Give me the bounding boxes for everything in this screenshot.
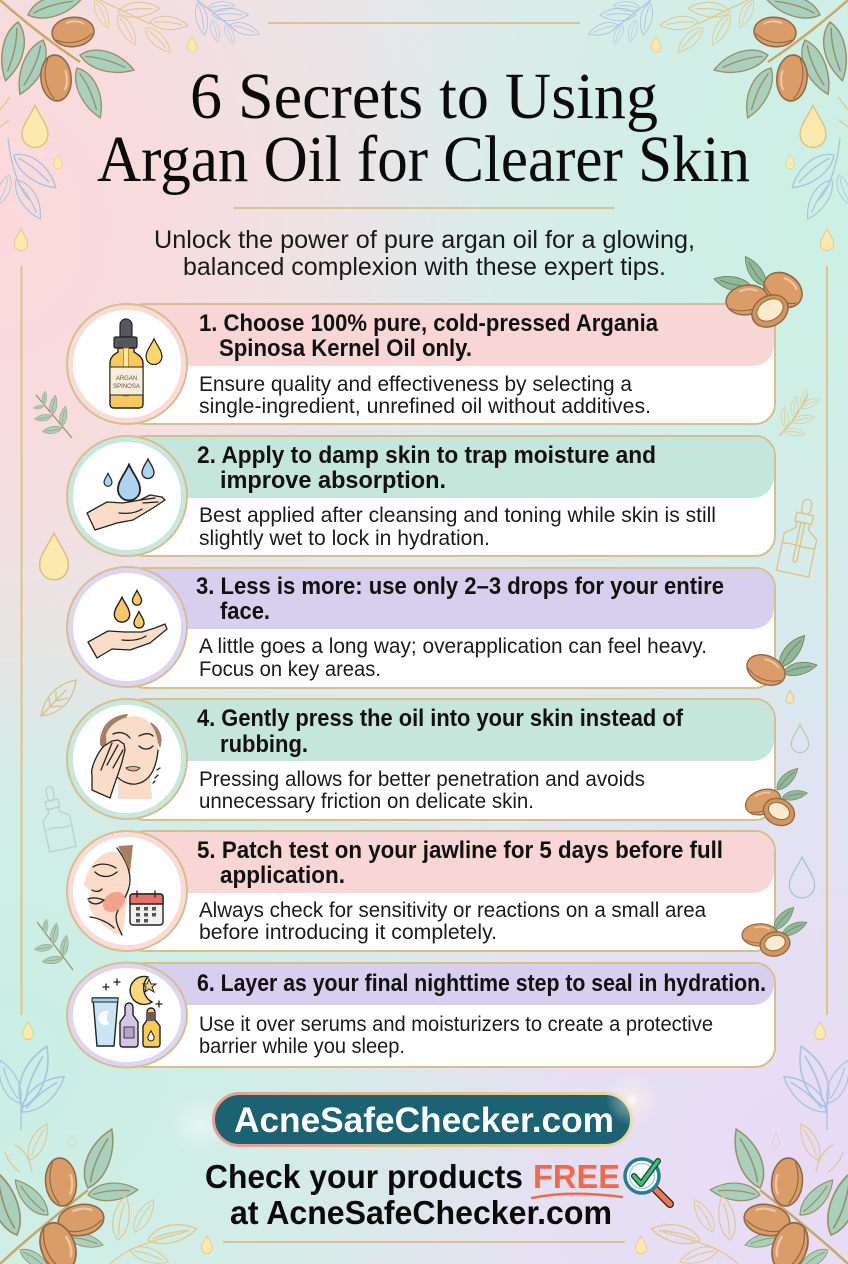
step 1 body: single-ingredient, unrefined oil without additives. <box>199 395 651 418</box>
step 5 heading <box>197 837 723 889</box>
card 6 <box>67 962 775 1068</box>
step 4 heading <box>197 705 684 758</box>
soft glow left of pill <box>168 1093 232 1157</box>
step 6 body: Use it over serums and moisturizers to create a protective <box>199 1013 713 1036</box>
step 6 body: barrier while you sleep. <box>199 1035 405 1058</box>
decoration: bottom-right branch <box>635 1022 848 1264</box>
cluster near card 5 <box>742 904 809 959</box>
call to action text <box>205 1158 622 1231</box>
step 6 icon: moon and skincare products <box>67 962 187 1068</box>
title: Argan Oil for Clearer Skin <box>97 123 750 196</box>
step 4 heading: 4. Gently press the oil into your skin instead of <box>197 705 684 732</box>
title: 6 Secrets to Using <box>190 60 658 133</box>
decoration: argan nut clusters <box>712 253 818 959</box>
step 1 body: Ensure quality and effectiveness by selecting a <box>199 373 632 396</box>
step 2 heading: 2. Apply to damp skin to trap moisture and <box>197 442 656 469</box>
step 6 heading: 6. Layer as your final nighttime step to seal in hydration. <box>197 970 766 997</box>
cluster near card 3 <box>742 631 818 691</box>
step 1 body <box>199 373 651 418</box>
step 4 icon: face and pressing hand <box>67 699 187 819</box>
step 4 body: unnecessary friction on delicate skin. <box>199 790 534 813</box>
step 2 body <box>199 504 716 550</box>
subtitle: Unlock the power of pure argan oil for a glowing, <box>154 226 695 254</box>
step 3 body: Focus on key areas. <box>199 658 381 681</box>
step 4 body: Pressing allows for better penetration and avoids <box>199 768 645 791</box>
icon: magnifier with check mark <box>625 1159 670 1204</box>
card 3 <box>67 567 775 688</box>
step 5 icon: face and calendar <box>67 831 187 951</box>
decoration: top-left branch <box>0 0 261 251</box>
call to action text: at AcneSafeChecker.com <box>230 1194 612 1231</box>
decoration: top-right branch <box>587 0 848 251</box>
step 3 body <box>199 635 707 681</box>
step 1 heading: 1. Choose 100% pure, cold-pressed Argania <box>199 310 658 337</box>
call to action text: FREE <box>533 1158 620 1195</box>
step 2 icon: hand with water drops <box>67 436 187 556</box>
step 2 heading <box>197 442 656 494</box>
step 3 icon: hand with oil drops <box>67 567 187 687</box>
step 2 heading: improve absorption. <box>220 467 446 494</box>
card 4 <box>67 699 775 820</box>
call to action pill <box>214 1074 658 1146</box>
call to action pill: AcneSafeChecker.com <box>234 1101 614 1140</box>
subtitle: balanced complexion with these expert tips. <box>183 253 666 281</box>
decoration: right sprigs and outlines <box>776 389 824 898</box>
step 3 heading: 3. Less is more: use only 2–3 drops for your entire <box>196 573 724 600</box>
title <box>97 60 750 196</box>
card 5 <box>67 831 775 951</box>
step 1 icon: dropper bottle: ARGAN <box>116 376 137 382</box>
step 5 heading: application. <box>220 862 345 889</box>
step 6 body <box>199 1013 713 1058</box>
step 5 body: Always check for sensitivity or reactions on a small area <box>199 899 706 922</box>
subtitle <box>154 226 695 281</box>
card 1 <box>67 304 775 424</box>
cluster near card 4 <box>742 765 808 831</box>
card 2 <box>67 436 775 556</box>
decoration: left sprigs and outlines <box>33 391 76 970</box>
step 5 body <box>199 899 706 944</box>
step 3 heading: face. <box>220 598 270 625</box>
decoration: bottom-left branch <box>0 1022 213 1264</box>
step 1 icon: dropper bottle <box>67 304 187 424</box>
step 3 heading <box>196 573 724 625</box>
cluster near card 1 <box>712 253 809 333</box>
step 5 body: before introducing it completely. <box>199 921 497 944</box>
step 2 body: slightly wet to lock in hydration. <box>199 527 490 550</box>
step 3 body: A little goes a long way; overapplication can feel heavy. <box>199 635 707 658</box>
step 4 body <box>199 768 645 813</box>
step 1 icon: dropper bottle: SPINOSA <box>113 384 140 390</box>
step 4 heading: rubbing. <box>220 731 308 758</box>
call to action text: Check your products <box>205 1158 523 1195</box>
step 1 heading <box>199 310 658 362</box>
step 5 heading: 5. Patch test on your jawline for 5 days before full <box>197 837 723 864</box>
step 2 body: Best applied after cleansing and toning while skin is still <box>199 504 716 527</box>
step 1 heading: Spinosa Kernel Oil only. <box>219 335 472 362</box>
